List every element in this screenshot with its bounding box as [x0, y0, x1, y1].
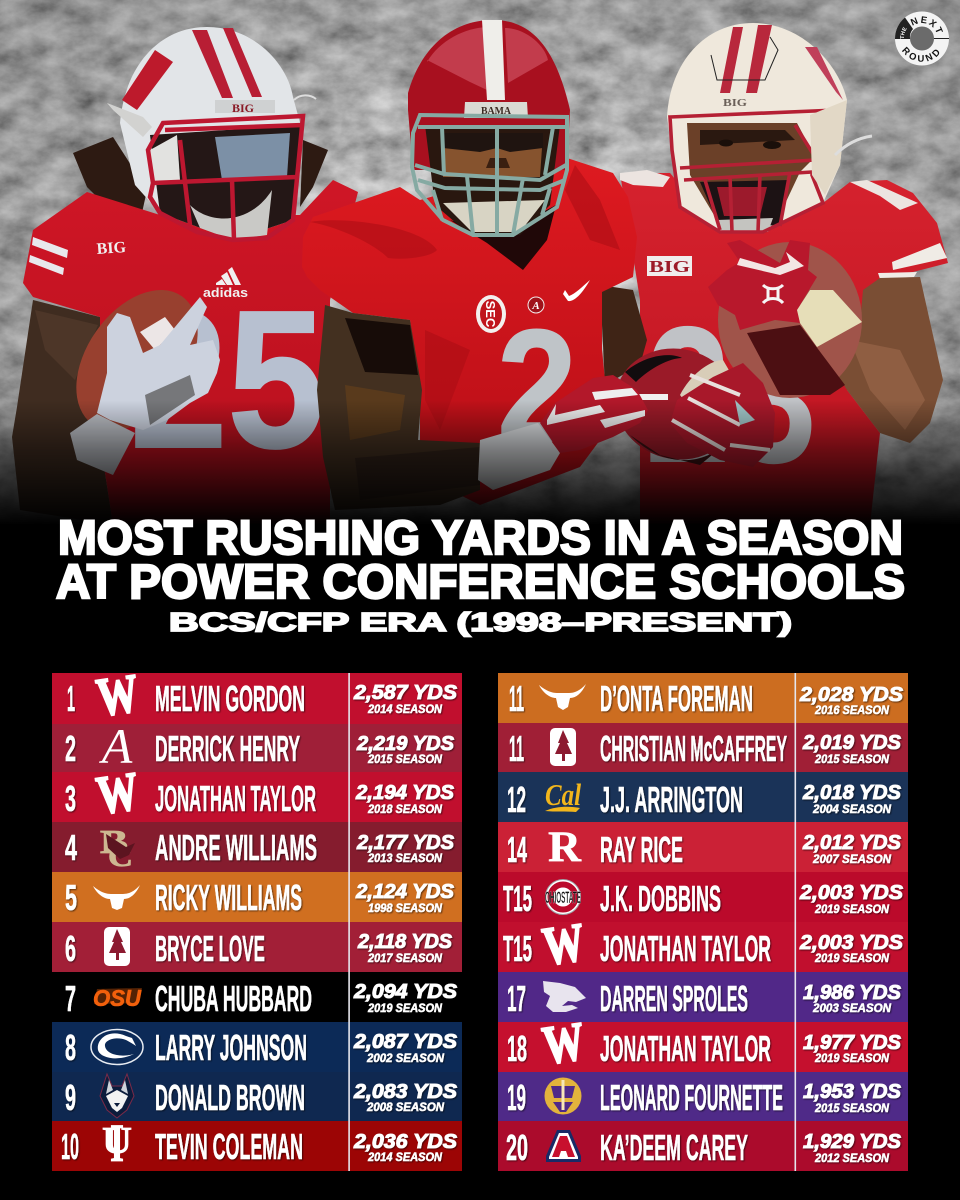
row 18 Jonathan Taylor: 2019 SEASON: [814, 1051, 889, 1065]
title: AT POWER CONFERENCE SCHOOLS: [56, 556, 905, 609]
right glove: [670, 363, 775, 467]
row 6 Bryce Love: 6: [65, 928, 76, 969]
row 8 Larry Johnson: LARRY JOHNSON: [155, 1027, 307, 1068]
row 3 Jonathan Taylor: 3: [65, 778, 76, 819]
row 11 D'Onta Foreman: 11: [509, 678, 524, 719]
helmet cable: [294, 95, 316, 100]
row 10 Tevin Coleman: TEVIN COLEMAN: [155, 1126, 303, 1167]
icon: K-State wildcat: [543, 981, 586, 1012]
row 1 Melvin Gordon: 1: [67, 678, 75, 719]
V-neck shadow: [450, 205, 556, 270]
title: [56, 512, 905, 609]
row 17 Darren Sproles: 17: [507, 978, 526, 1019]
row 14 Ray Rice: 2,012 YDS: [802, 832, 902, 854]
helmet: [667, 23, 847, 232]
row 8 Larry Johnson: 2,087 YDS: [353, 1031, 458, 1053]
row 15 J.K. Dobbins: J.K. DOBBINS: [600, 878, 721, 919]
helmet: [408, 20, 570, 170]
BIG patch: [647, 256, 692, 276]
icon: Oklahoma State OSU: OSU: [93, 985, 142, 1011]
row 12 Christian McCaffrey: 11: [509, 728, 524, 769]
script A patch: [528, 297, 544, 313]
row 6 Bryce Love: 2017 SEASON: [367, 951, 442, 965]
glove: [708, 240, 817, 330]
SEC patch: [476, 295, 506, 333]
player: Derrick Henry, center: [302, 20, 775, 510]
row 4 Andre Williams: [52, 822, 462, 873]
BIG patch: BIG: [96, 239, 127, 258]
row 20 Ka'Deem Carey: 1,929 YDS: [803, 1131, 902, 1153]
row 17 Darren Sproles: 2003 SEASON: [812, 1001, 891, 1015]
icon: Boston College BC: B: [100, 824, 128, 861]
jersey number: 2: [497, 296, 577, 475]
BAMA plate: [464, 102, 528, 118]
icon: Rutgers R: R: [548, 824, 582, 871]
face: [687, 123, 815, 225]
row 14 Ray Rice: RAY RICE: [600, 829, 683, 870]
table: ranks 1-10: [52, 663, 462, 1173]
row 20 Ka'Deem Carey: KA’DEEM CAREY: [600, 1127, 748, 1168]
row 11 D'Onta Foreman: 2016 SEASON: [814, 703, 889, 717]
mouth guard: [700, 180, 790, 228]
row 1 Melvin Gordon: MELVIN GORDON: [155, 678, 305, 719]
facemask: [670, 110, 837, 232]
SEC patch: SEC: [483, 301, 498, 328]
row 16 Jonathan Taylor: JONATHAN TAYLOR: [600, 928, 771, 969]
icon: Boston College BC: [100, 824, 135, 873]
row 17 Darren Sproles: DARREN SPROLES: [600, 978, 748, 1019]
player: Jonathan Taylor, right: [620, 23, 948, 525]
row 1 Melvin Gordon: 2014 SEASON: [367, 702, 442, 716]
row 13 J.J. Arrington: J.J. ARRINGTON: [600, 779, 743, 820]
row 19 Leonard Fournette: 19: [507, 1077, 526, 1118]
row 13 J.J. Arrington: 2,018 YDS: [802, 782, 902, 804]
logo wordmark: THE: [900, 26, 907, 39]
helmet BIG plate: BIG: [723, 97, 748, 109]
under armour mark: [763, 285, 783, 303]
row 5 Ricky Williams: [52, 872, 462, 922]
icon: Texas longhorn: [539, 684, 586, 710]
row 16 Jonathan Taylor: 2,003 YDS: [799, 932, 904, 954]
row 6 Bryce Love: BRYCE LOVE: [155, 928, 265, 969]
row 11 D'Onta Foreman: D’ONTA FOREMAN: [600, 678, 753, 719]
row 13 J.J. Arrington: 2004 SEASON: [812, 802, 891, 816]
row 2 Derrick Henry: 2,219 YDS: [356, 733, 455, 755]
row 14 Ray Rice: 14: [507, 829, 527, 870]
row 9 Donald Brown: 9: [65, 1077, 76, 1118]
icon: Penn State lion: [91, 1030, 143, 1064]
row 5 Ricky Williams: RICKY WILLIAMS: [155, 877, 302, 918]
row 6 Bryce Love: [52, 922, 462, 972]
row 14 Ray Rice: 2007 SEASON: [812, 852, 891, 866]
helmet cable: [835, 136, 872, 155]
THE wedge: [895, 18, 913, 38]
row 4 Andre Williams: 4: [65, 827, 77, 868]
icon: Boston College BC: C: [108, 840, 133, 873]
row 17 Darren Sproles: 1,986 YDS: [803, 982, 902, 1004]
row 12 Christian McCaffrey: 2015 SEASON: [814, 752, 889, 766]
row 4 Andre Williams: ANDRE WILLIAMS: [155, 827, 317, 868]
icon: Alabama A: A: [99, 718, 133, 774]
row 20 Ka'Deem Carey: 2012 SEASON: [814, 1151, 889, 1165]
nike swoosh: [563, 280, 590, 301]
row 10 Tevin Coleman: 2,036 YDS: [353, 1131, 458, 1153]
row 9 Donald Brown: [52, 1072, 462, 1121]
row 2 Derrick Henry: 2015 SEASON: [367, 752, 442, 766]
row 15 J.K. Dobbins: OHIOSTATE: [545, 888, 581, 907]
row 16 Jonathan Taylor: [498, 912, 908, 977]
row 8 Larry Johnson: 8: [65, 1027, 76, 1068]
BIG patch: BIG: [649, 257, 690, 276]
row 7 Chuba Hubbard: CHUBA HUBBARD: [155, 978, 312, 1019]
adidas mark: [203, 267, 248, 300]
row 15 J.K. Dobbins: 2,003 YDS: [799, 882, 904, 904]
row 16 Jonathan Taylor: T15: [503, 928, 532, 969]
row 5 Ricky Williams: 5: [65, 877, 77, 918]
icon: Arizona A: [546, 1130, 581, 1162]
football: [718, 242, 862, 398]
wrist band: [478, 423, 560, 490]
logo wordmark: NEXT: [910, 16, 943, 32]
icon: Stanford S: [104, 927, 130, 966]
jersey number 25: 25: [130, 270, 325, 489]
icon: Texas longhorn: [93, 885, 140, 910]
jersey number: 23: [645, 286, 817, 504]
icon: Indiana IU: I: [110, 1113, 124, 1173]
left glove: [540, 375, 648, 453]
arm: [820, 277, 943, 443]
row 12 Christian McCaffrey: [498, 723, 908, 772]
row 7 Chuba Hubbard: [52, 972, 462, 1022]
jersey: [302, 158, 637, 505]
player: Melvin Gordon, left: [12, 27, 358, 525]
row 18 Jonathan Taylor: [498, 1011, 908, 1076]
wrist wrap: [70, 414, 135, 475]
row 5 Ricky Williams: 1998 SEASON: [368, 901, 442, 915]
row 2 Derrick Henry: [52, 718, 462, 774]
row 18 Jonathan Taylor: JONATHAN TAYLOR: [600, 1028, 771, 1069]
row 4 Andre Williams: 2,177 YDS: [356, 832, 455, 854]
row 18 Jonathan Taylor: 1,977 YDS: [803, 1032, 902, 1054]
row 5 Ricky Williams: 2,124 YDS: [355, 881, 455, 903]
logo: The Next Round: [895, 12, 949, 66]
row 12 Christian McCaffrey: 2,019 YDS: [802, 732, 902, 754]
row 13 J.J. Arrington: 12: [507, 779, 526, 820]
icon: Wisconsin W: W: [93, 663, 142, 728]
row 8 Larry Johnson: 2002 SEASON: [366, 1051, 444, 1065]
icon: Wisconsin W: W: [539, 1011, 588, 1076]
row 11 D'Onta Foreman: 2,028 YDS: [799, 684, 904, 706]
row 13 J.J. Arrington: [498, 772, 908, 822]
row 10 Tevin Coleman: [52, 1113, 462, 1173]
jersey: [620, 173, 948, 525]
row 9 Donald Brown: 2,083 YDS: [353, 1081, 458, 1103]
sleeve stripes: [29, 237, 68, 275]
icon: Indiana IU: U: [102, 1120, 132, 1162]
wrist tape: [797, 290, 862, 347]
row 20 Ka'Deem Carey: [498, 1121, 908, 1171]
row 15 J.K. Dobbins: [498, 872, 908, 922]
row 16 Jonathan Taylor: 2019 SEASON: [814, 951, 889, 965]
title: MOST RUSHING YARDS IN A SEASON: [58, 512, 903, 565]
row 10 Tevin Coleman: 2014 SEASON: [367, 1150, 442, 1164]
subtitle: BCS/CFP ERA (1998–PRESENT): [169, 609, 792, 637]
row 3 Jonathan Taylor: [52, 761, 462, 826]
row 3 Jonathan Taylor: 2018 SEASON: [367, 802, 442, 816]
icon: LSU tiger: [544, 1078, 582, 1114]
script A patch: A: [531, 300, 540, 312]
row 10 Tevin Coleman: 10: [61, 1126, 79, 1167]
row 19 Leonard Fournette: [498, 1072, 908, 1121]
facemask: [148, 116, 303, 240]
row 2 Derrick Henry: DERRICK HENRY: [155, 728, 300, 769]
icon: Cal script: Cal: [545, 777, 581, 812]
helmet BIG plate: [215, 100, 275, 115]
row 7 Chuba Hubbard: 2019 SEASON: [367, 1001, 442, 1015]
row 7 Chuba Hubbard: 2,094 YDS: [353, 981, 458, 1003]
sleeve stripes: [878, 243, 947, 279]
left arm: [12, 300, 113, 525]
helmet: [120, 27, 302, 240]
row 7 Chuba Hubbard: 7: [65, 978, 76, 1019]
icon: Wisconsin W: W: [93, 761, 142, 826]
icon: UConn husky: [100, 1074, 134, 1118]
icon: Wisconsin W: W: [539, 912, 588, 977]
logo wordmark: [900, 16, 943, 62]
shoulder numbers: [620, 170, 918, 210]
glove: [97, 297, 220, 430]
jersey: [23, 180, 358, 525]
row 20 Ka'Deem Carey: 20: [506, 1127, 528, 1168]
helmet BIG plate: BIG: [232, 101, 254, 115]
row 15 J.K. Dobbins: 2019 SEASON: [814, 902, 889, 916]
row 19 Leonard Fournette: 1,953 YDS: [803, 1081, 902, 1103]
row 18 Jonathan Taylor: 18: [507, 1028, 527, 1069]
row 17 Darren Sproles: [498, 972, 908, 1022]
row 14 Ray Rice: [498, 822, 908, 872]
icon: Stanford S: [550, 728, 576, 766]
row 9 Donald Brown: 2008 SEASON: [366, 1100, 444, 1114]
row 9 Donald Brown: DONALD BROWN: [155, 1077, 305, 1118]
face and visor: [150, 125, 302, 240]
chin guard: [190, 190, 272, 240]
row 4 Andre Williams: 2013 SEASON: [367, 851, 442, 865]
shoulder fold shading: [310, 165, 620, 430]
row 15 J.K. Dobbins: T15: [503, 878, 532, 919]
adidas mark: adidas: [203, 285, 248, 300]
row 3 Jonathan Taylor: 2,194 YDS: [355, 782, 455, 804]
row 1 Melvin Gordon: 2,587 YDS: [353, 682, 458, 704]
facemask: [412, 115, 567, 235]
row 8 Larry Johnson: [52, 1022, 462, 1072]
row 11 D'Onta Foreman: [498, 673, 908, 723]
hair: [73, 137, 328, 222]
row 1 Melvin Gordon: [52, 663, 462, 728]
football: [603, 335, 751, 473]
football: [51, 267, 223, 453]
row 19 Leonard Fournette: 2015 SEASON: [814, 1101, 889, 1115]
bottom fade to black: [0, 400, 960, 525]
table: ranks 11-20: [498, 673, 908, 1171]
row 2 Derrick Henry: 2: [65, 728, 76, 769]
logo wordmark: ROUND: [902, 46, 940, 62]
icon: Ohio State: [545, 880, 581, 914]
helmet side: [810, 100, 847, 195]
BAMA plate: BAMA: [481, 105, 511, 117]
row 3 Jonathan Taylor: JONATHAN TAYLOR: [155, 778, 316, 819]
face: [425, 125, 560, 235]
right arm: [600, 285, 647, 385]
chin guard: [443, 200, 545, 232]
row 6 Bryce Love: 2,118 YDS: [357, 931, 453, 953]
left arm with tattoos: [317, 305, 480, 510]
